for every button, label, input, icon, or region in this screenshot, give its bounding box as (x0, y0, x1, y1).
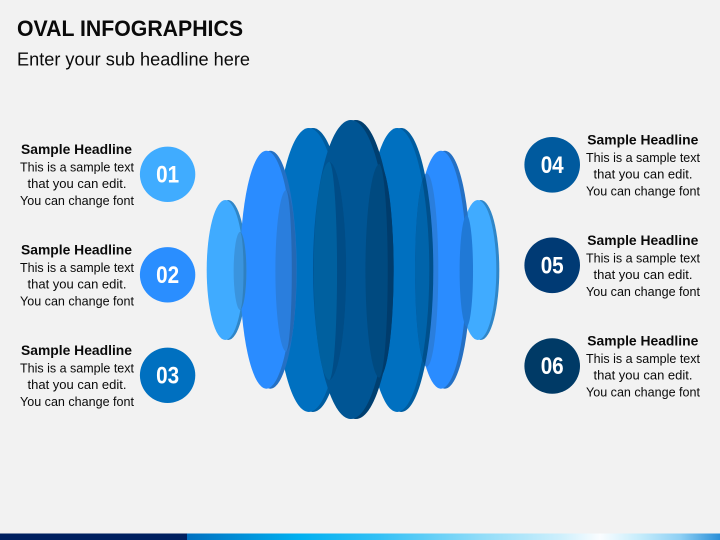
text block 03: that you can edit. (28, 378, 126, 392)
text block 03: Sample Headline (21, 343, 132, 358)
text block 04: You can change font (586, 184, 700, 198)
badge 01: 01 (156, 162, 179, 188)
text block 05: that you can edit. (594, 268, 692, 282)
badge 05 (524, 237, 580, 293)
text block 04: that you can edit. (594, 168, 692, 182)
badge 01 (140, 147, 195, 202)
text block 02 (20, 242, 134, 308)
text block 02: Sample Headline (21, 242, 132, 258)
badge 03: 03 (156, 362, 179, 390)
oval: right 3 (365, 128, 433, 412)
oval: left 1 (207, 200, 247, 340)
text block 04 (586, 132, 700, 198)
badge 06: 06 (541, 353, 564, 380)
oval cluster chart (207, 120, 499, 419)
text block 04: Sample Headline (587, 132, 699, 148)
text block 02: You can change font (20, 294, 134, 308)
text block 01: This is a sample text (20, 160, 134, 174)
subtitle: Enter your sub headline here (17, 50, 250, 70)
title: OVAL INFOGRAPHICS (17, 16, 243, 41)
oval: center (313, 120, 394, 419)
footer bar (0, 534, 720, 540)
badge 03 (140, 348, 195, 403)
badge 06 (524, 338, 580, 394)
text block 05: Sample Headline (587, 233, 699, 248)
overlap: left 3 and center (314, 162, 346, 380)
overlap: center and right 3 (365, 164, 394, 378)
oval: left 2 (240, 151, 297, 389)
text block 06 (586, 334, 700, 400)
text block 04: This is a sample text (586, 151, 700, 165)
text block 03: You can change font (20, 395, 134, 409)
text block 06: Sample Headline (587, 334, 699, 348)
text block 05 (586, 233, 700, 299)
text block 02: This is a sample text (20, 261, 134, 275)
overlap: left 2 and left 3 (275, 190, 296, 352)
text block 01 (20, 142, 134, 208)
text block 03 (20, 343, 134, 409)
badge 02 (140, 247, 195, 302)
oval: right 2 (415, 151, 471, 389)
text block 06: This is a sample text (586, 352, 700, 366)
overlap: left 1 and left 2 (234, 232, 246, 310)
text block 05: This is a sample text (586, 252, 700, 266)
text block 06: You can change font (586, 386, 700, 400)
text block 01: that you can edit. (28, 177, 126, 191)
text block 01: Sample Headline (21, 142, 132, 157)
badge 04: 04 (541, 152, 564, 179)
badge 05: 05 (541, 252, 564, 280)
text block 01: You can change font (20, 194, 134, 208)
oval: left 3 (275, 128, 347, 412)
badge 02: 02 (156, 262, 179, 289)
text block 06: that you can edit. (594, 368, 692, 382)
text block 05: You can change font (586, 285, 700, 299)
oval: right 1 (459, 200, 499, 340)
text block 03: This is a sample text (20, 362, 134, 376)
overlap: right 3 and right 2 (415, 173, 438, 367)
badge 04 (524, 137, 580, 193)
text block 02: that you can edit. (28, 278, 126, 292)
overlap: right 2 and right 1 (460, 215, 473, 327)
